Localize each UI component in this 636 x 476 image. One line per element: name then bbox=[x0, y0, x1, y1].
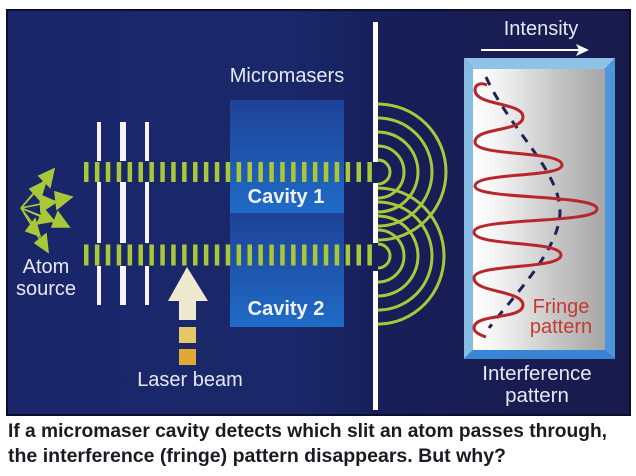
label: Interference pattern: Interference bbox=[482, 362, 592, 385]
frame left bevel bbox=[464, 58, 473, 359]
label: Cavity 1: Cavity 1 bbox=[248, 186, 324, 208]
lower slit wave arcs bbox=[378, 188, 444, 324]
label: Interference pattern: pattern bbox=[505, 384, 569, 407]
arrow: intensity direction bbox=[481, 44, 589, 56]
atom source arrows bbox=[21, 169, 72, 252]
cavity 1 block bbox=[230, 100, 344, 213]
atom beams bbox=[84, 172, 373, 255]
panel: interference pattern screen bbox=[464, 58, 615, 359]
frame bottom bevel bbox=[464, 350, 615, 359]
label: Atom source: Atom bbox=[23, 256, 69, 278]
caption: the interference (fringe) pattern disappears. But why? bbox=[8, 446, 506, 467]
label: Atom source bbox=[16, 256, 76, 300]
label: Cavity 2: Cavity 2 bbox=[248, 298, 324, 320]
label: Fringe pattern: Fringe bbox=[533, 296, 589, 318]
laser beam arrow bbox=[168, 267, 208, 365]
screen surface bbox=[473, 69, 605, 350]
panel: micromaser cavities bbox=[230, 100, 344, 327]
label: Fringe pattern bbox=[530, 296, 592, 338]
dashed non-interference curve bbox=[486, 77, 560, 328]
label: Atom source: source bbox=[16, 278, 76, 300]
upper slit wave arcs bbox=[378, 104, 446, 240]
cavity 2 block bbox=[230, 213, 344, 327]
caption: If a micromaser cavity detects which slit an atom passes through, bbox=[8, 421, 607, 442]
lower atom beam bbox=[84, 244, 373, 266]
label: Interference pattern bbox=[482, 362, 592, 407]
heading: Micromasers: Micromasers bbox=[230, 65, 344, 87]
red fringe curve bbox=[474, 84, 597, 337]
slits: three white collimator bars bbox=[97, 122, 149, 305]
frame right bevel bbox=[605, 58, 615, 359]
central screen with two slits bbox=[373, 22, 378, 410]
caption bbox=[8, 421, 607, 467]
upper atom beam bbox=[84, 162, 373, 182]
label: Intensity: Intensity bbox=[504, 18, 578, 40]
frame top bevel bbox=[464, 58, 615, 69]
diffraction wavefronts bbox=[378, 104, 446, 324]
label: Laser beam: Laser beam bbox=[137, 369, 243, 391]
label: Fringe pattern: pattern bbox=[530, 316, 592, 338]
